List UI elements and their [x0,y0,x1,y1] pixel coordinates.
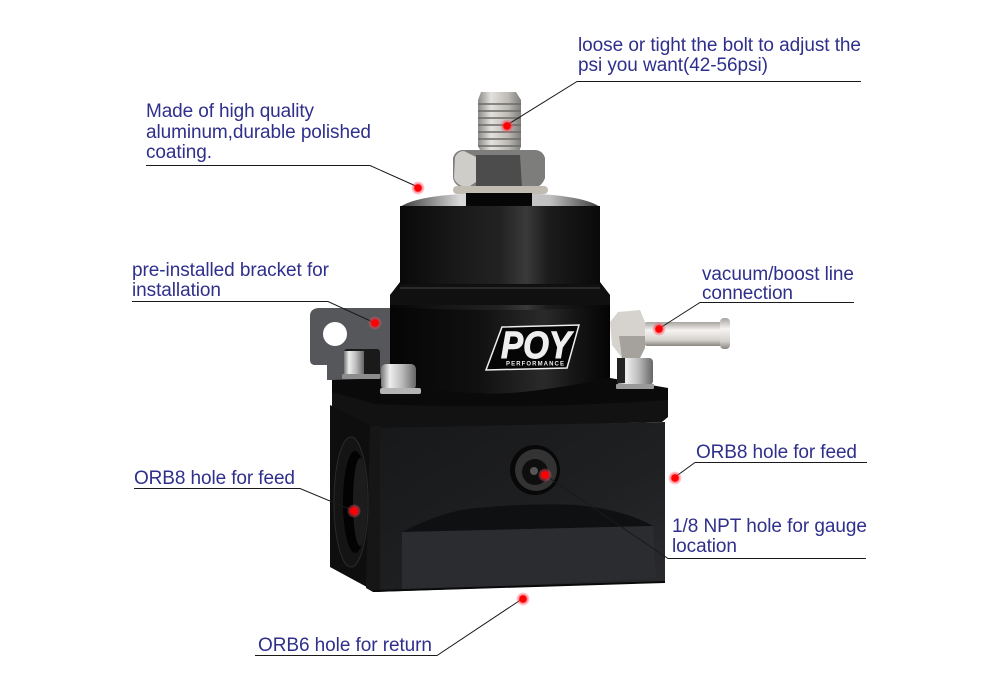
bolts [342,349,654,394]
callout: gauge hole [538,468,867,558]
callout: aluminum [146,101,424,194]
callout: aluminum: aluminum,durable polished [146,122,371,143]
product: fuel pressure regulator [310,92,730,592]
callout: aluminum: Made of high quality [146,101,314,122]
main body [330,405,665,592]
callout: ORB6 [255,592,530,656]
callout: bracket: pre-installed bracket for [132,260,330,281]
logo: PERFORMANCE [506,362,564,368]
callout: vacuum line: vacuum/boost line [702,264,854,285]
callout: vacuum line [652,264,854,336]
logo: POY [501,325,574,367]
port: gauge hole [510,445,560,495]
callout: bracket [132,260,382,330]
callout: gauge hole: location [672,536,737,557]
callout: bolt adjustment [500,35,861,132]
callout: aluminum: coating. [146,142,212,163]
callout: ORB8 left: ORB8 hole for feed [134,468,295,489]
callout: ORB8 left [134,468,360,518]
threaded bolt [478,92,521,152]
bracket [310,308,392,380]
adjustment cap [390,193,610,393]
callout: bolt adjustment: psi you want(42-56psi) [578,55,768,76]
callout: ORB8 right [668,442,867,484]
hex nut and washer [453,150,548,194]
callout: ORB8 right: ORB8 hole for feed [696,442,857,463]
callout: vacuum line: connection [702,283,793,304]
callout: ORB6: ORB6 hole for return [258,635,432,656]
callout: bracket: installation [132,280,221,301]
callout: gauge hole: 1/8 NPT hole for gauge [672,516,867,537]
port: side hole [334,437,368,567]
callout: bolt adjustment: loose or tight the bolt to adjust the [578,35,861,56]
pressure fitting [610,310,730,358]
mounting plate [332,378,668,430]
